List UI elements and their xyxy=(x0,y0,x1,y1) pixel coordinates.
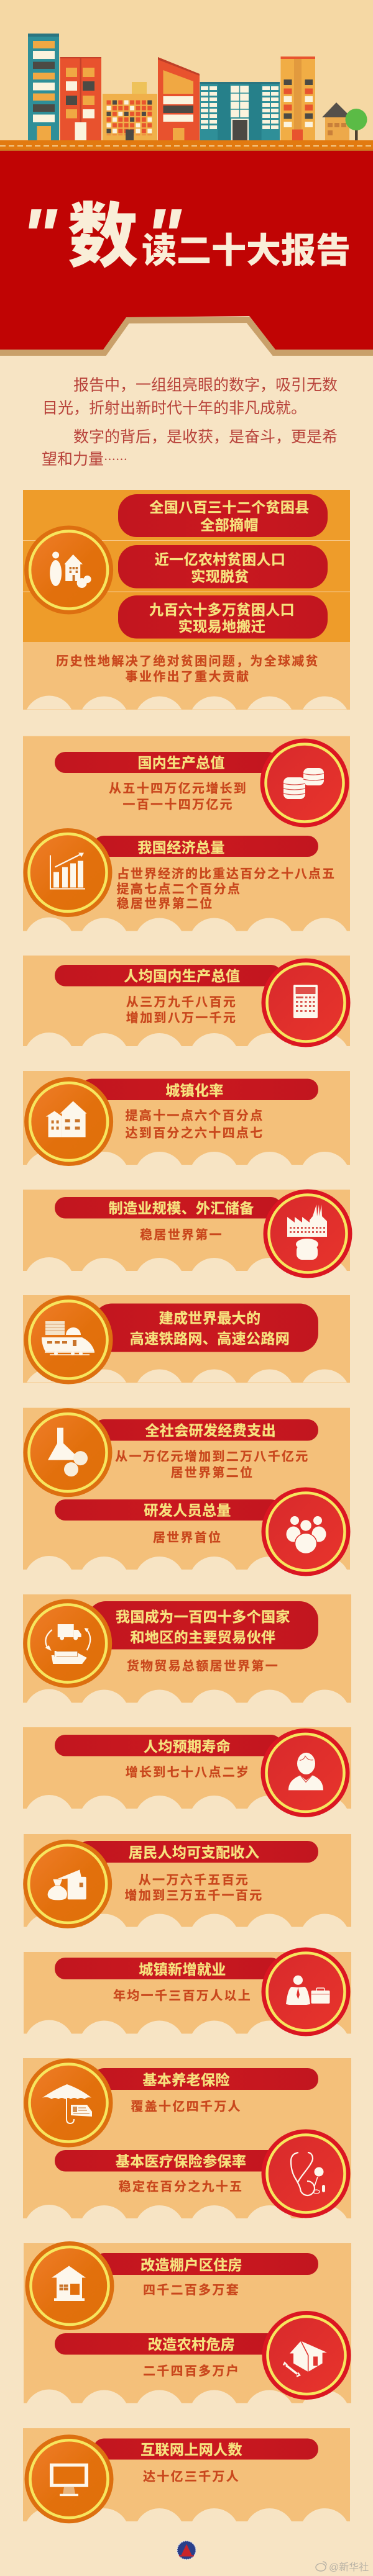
description: 增长到七十八点二岁 xyxy=(126,1765,250,1779)
icon: house xyxy=(25,2241,114,2330)
description: 年均一千三百万人以上 xyxy=(113,1989,252,2003)
pill: rural poor xyxy=(118,545,328,589)
description: 二千四百多万户 xyxy=(143,2364,240,2379)
description: 达到百分之六十四点七 xyxy=(126,1126,264,1141)
icon: town buildings xyxy=(24,1077,113,1166)
pill: economic output: 我国经济总量 xyxy=(137,839,225,856)
pill: internet users: 互联网上网人数 xyxy=(140,2442,242,2458)
icon: employee and briefcase xyxy=(261,1947,351,2036)
description: 覆盖十亿四千万人 xyxy=(131,2100,242,2114)
watermark: @新华社 xyxy=(329,2562,369,2573)
building: small house xyxy=(322,102,351,140)
pill: high-speed networks: 高速铁路网、高速公路网 xyxy=(130,1331,290,1347)
pill: per-capita GDP xyxy=(55,965,282,986)
pill: GDP xyxy=(55,752,279,773)
pill: relocation: 实现易地搬迁 xyxy=(178,618,265,635)
panel: social insurance xyxy=(23,2058,351,2218)
pill: pension insurance xyxy=(93,2068,318,2090)
icon: train xyxy=(24,1295,113,1385)
pill: relocation xyxy=(118,595,328,638)
pill: rural poor: 近一亿农村贫困人口 xyxy=(155,551,285,567)
pill: medical insurance: 基本医疗保险参保率 xyxy=(116,2153,246,2169)
icon: wallet and money bag xyxy=(23,1840,112,1928)
description: 提高七点二个百分点 xyxy=(117,881,241,896)
icon: truck and ship xyxy=(23,1599,112,1688)
description: 四千二百多万套 xyxy=(143,2283,240,2297)
title: " xyxy=(145,194,182,279)
pill: rural housing: 改造农村危房 xyxy=(148,2336,235,2352)
description: 货物贸易总额居世界第一 xyxy=(127,1658,279,1673)
building: teal tower xyxy=(28,34,59,140)
description: 历史性地解决了绝对贫困问题，为全球减贫 xyxy=(56,654,320,669)
panel: housing renovation xyxy=(24,2241,351,2403)
pill: urbanization rate xyxy=(81,1079,318,1100)
pill: internet users xyxy=(93,2439,318,2460)
pill: new urban jobs: 城镇新增就业 xyxy=(139,1961,226,1977)
icon: person and house xyxy=(24,525,113,615)
description: 稳定在百分之九十五 xyxy=(119,2179,243,2194)
pill: R&D personnel xyxy=(55,1499,282,1521)
building: slanted red block xyxy=(158,57,200,140)
icon: tree xyxy=(346,109,367,140)
icon: coins xyxy=(260,739,349,827)
panel: per-capita GDP xyxy=(23,956,351,1047)
panel: urbanization xyxy=(23,1071,350,1166)
pill: poor counties: 全国八百三十二个贫困县 xyxy=(149,499,310,515)
description: 稳居世界第一 xyxy=(140,1228,223,1242)
panel: manufacturing xyxy=(23,1190,352,1278)
panel: trade xyxy=(23,1594,351,1702)
icon: person bust xyxy=(261,1729,349,1817)
pill: rural poor: 实现脱贫 xyxy=(191,568,249,584)
description: 事业作出了重大贡献 xyxy=(126,670,250,684)
panel: disposable income xyxy=(23,1834,351,1928)
description: 一百一十四万亿元 xyxy=(122,798,234,812)
pill: relocation: 九百六十多万贫困人口 xyxy=(149,602,295,618)
description: 从三万九千八百元 xyxy=(126,995,237,1010)
icon: publisher logo xyxy=(177,2541,196,2559)
pill: trading partner: 和地区的主要贸易伙伴 xyxy=(130,1629,275,1645)
pill: disposable income: 居民人均可支配收入 xyxy=(129,1844,259,1860)
panel: employment xyxy=(24,1947,351,2036)
pill: R&D personnel: 研发人员总量 xyxy=(144,1503,231,1519)
panel: transport network xyxy=(23,1295,350,1385)
pill: disposable income xyxy=(78,1841,318,1863)
pill: shantytown housing: 改造棚户区住房 xyxy=(140,2257,242,2273)
icon: stethoscope xyxy=(261,2130,351,2218)
pill: poor counties xyxy=(118,494,328,537)
description: 稳居世界第二位 xyxy=(117,896,214,911)
description xyxy=(126,1108,264,1141)
pill: manufacturing and reserves xyxy=(55,1197,282,1218)
pill: R&D spending: 全社会研发经费支出 xyxy=(145,1422,276,1439)
pill: life expectancy xyxy=(55,1735,282,1756)
intro text: 数字的背后，是收获，是奋斗，更是希 xyxy=(73,428,338,446)
icon: bar chart xyxy=(24,828,112,917)
pill: rural housing xyxy=(55,2333,282,2354)
sky band xyxy=(0,0,373,142)
intro text: 报告中，一组组亮眼的数字，吸引无数 xyxy=(73,376,338,394)
panel: research and development xyxy=(23,1408,351,1576)
pill: poor counties: 全部摘帽 xyxy=(200,517,259,533)
description: 居世界首位 xyxy=(153,1530,222,1545)
pill: per-capita GDP: 人均国内生产总值 xyxy=(124,968,240,984)
pill: manufacturing and reserves: 制造业规模、外汇储备 xyxy=(109,1200,254,1216)
intro text: …… xyxy=(104,451,127,468)
icon: monitor xyxy=(25,2434,113,2523)
description xyxy=(56,654,320,684)
panel: life expectancy xyxy=(23,1727,351,1817)
title: 读二十大报告 xyxy=(142,223,351,273)
description: 增加到三万五千一百元 xyxy=(124,1889,264,1903)
icon: flask and coins xyxy=(24,1408,112,1497)
intro text xyxy=(42,376,338,468)
road xyxy=(0,140,373,151)
description: 从五十四万亿元增长到 xyxy=(109,782,247,796)
building: red block xyxy=(60,57,101,140)
illustration: city skyline xyxy=(28,34,367,140)
pill: life expectancy: 人均预期寿命 xyxy=(144,1738,231,1755)
pill: pension insurance: 基本养老保险 xyxy=(142,2072,230,2088)
description: 达十亿三千万人 xyxy=(143,2470,240,2484)
icon: calculator xyxy=(261,959,351,1047)
pill: new urban jobs xyxy=(55,1958,282,1979)
description: 增加到八万一千元 xyxy=(126,1011,237,1025)
pill: economic output xyxy=(93,836,318,857)
title banner xyxy=(0,151,373,353)
pill: R&D spending xyxy=(93,1419,318,1440)
panel: economy xyxy=(23,736,350,931)
pill: trading partner xyxy=(87,1601,318,1649)
description xyxy=(124,1873,264,1903)
pill: trading partner: 我国成为一百四十多个国家 xyxy=(116,1609,290,1625)
description: 占世界经济的比重达百分之十八点五 xyxy=(117,866,336,881)
icon: factory and coins xyxy=(264,1190,352,1278)
title xyxy=(21,179,351,281)
description xyxy=(115,1450,310,1480)
description: 从一万亿元增加到二万八千亿元 xyxy=(115,1450,310,1464)
title: " xyxy=(21,194,58,279)
building: yellow grid block xyxy=(103,82,157,140)
panel: poverty alleviation xyxy=(23,490,350,710)
intro text: 望和力量 xyxy=(42,451,104,468)
pill: GDP: 国内生产总值 xyxy=(137,754,225,771)
description xyxy=(109,782,247,812)
building: teal office xyxy=(200,82,280,140)
pill: high-speed networks: 建成世界最大的 xyxy=(159,1310,260,1326)
pill: high-speed networks xyxy=(93,1304,318,1352)
description: 居世界第二位 xyxy=(170,1465,254,1480)
description xyxy=(117,866,336,911)
pill: medical insurance xyxy=(55,2150,282,2172)
intro text: 目光，折射出新时代十年的非凡成就。 xyxy=(42,400,306,417)
icon: house with wrench xyxy=(262,2311,351,2400)
pill: urbanization rate: 城镇化率 xyxy=(165,1082,224,1098)
icon: umbrella and card xyxy=(24,2059,113,2147)
pill: shantytown housing xyxy=(93,2253,318,2275)
description xyxy=(126,995,237,1025)
building: orange tower xyxy=(281,56,315,140)
icon: people xyxy=(261,1488,351,1576)
description: 从一万六千五百元 xyxy=(139,1873,249,1887)
description: 提高十一点六个百分点 xyxy=(126,1108,264,1123)
panel: internet users xyxy=(23,2428,350,2523)
title: 数 xyxy=(68,179,138,281)
